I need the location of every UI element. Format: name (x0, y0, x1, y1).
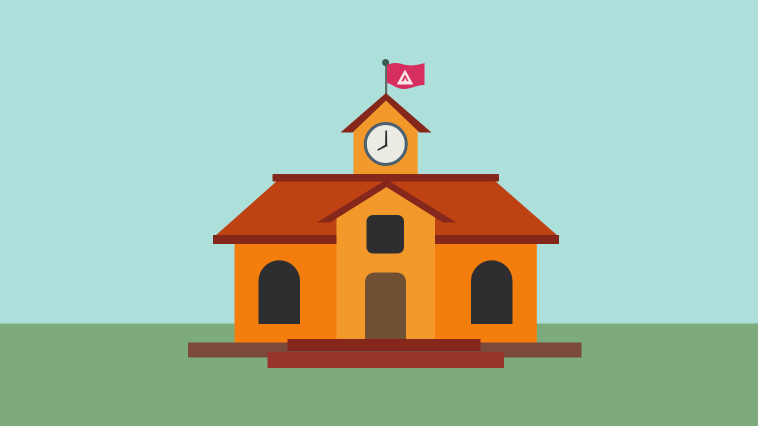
tower wall (354, 100, 418, 175)
main roof (213, 174, 559, 244)
right wing wall (435, 244, 537, 343)
icon: clock (365, 124, 406, 164)
door (365, 272, 406, 339)
central entrance block (317, 180, 456, 340)
left wing wall (234, 244, 336, 343)
ground (0, 324, 758, 426)
left arched window (258, 260, 300, 324)
left eave (213, 235, 338, 244)
roof ridge bar (272, 174, 499, 182)
right eave (434, 235, 559, 244)
sky background (0, 0, 758, 324)
gable roof (317, 180, 456, 222)
upper window (366, 215, 404, 254)
icon: flag with pole (382, 59, 424, 97)
upper step (288, 339, 480, 351)
tower roof (340, 93, 432, 132)
right arched window (471, 260, 512, 324)
lower step (268, 352, 504, 368)
clock tower (340, 93, 432, 175)
foundation (188, 342, 582, 358)
